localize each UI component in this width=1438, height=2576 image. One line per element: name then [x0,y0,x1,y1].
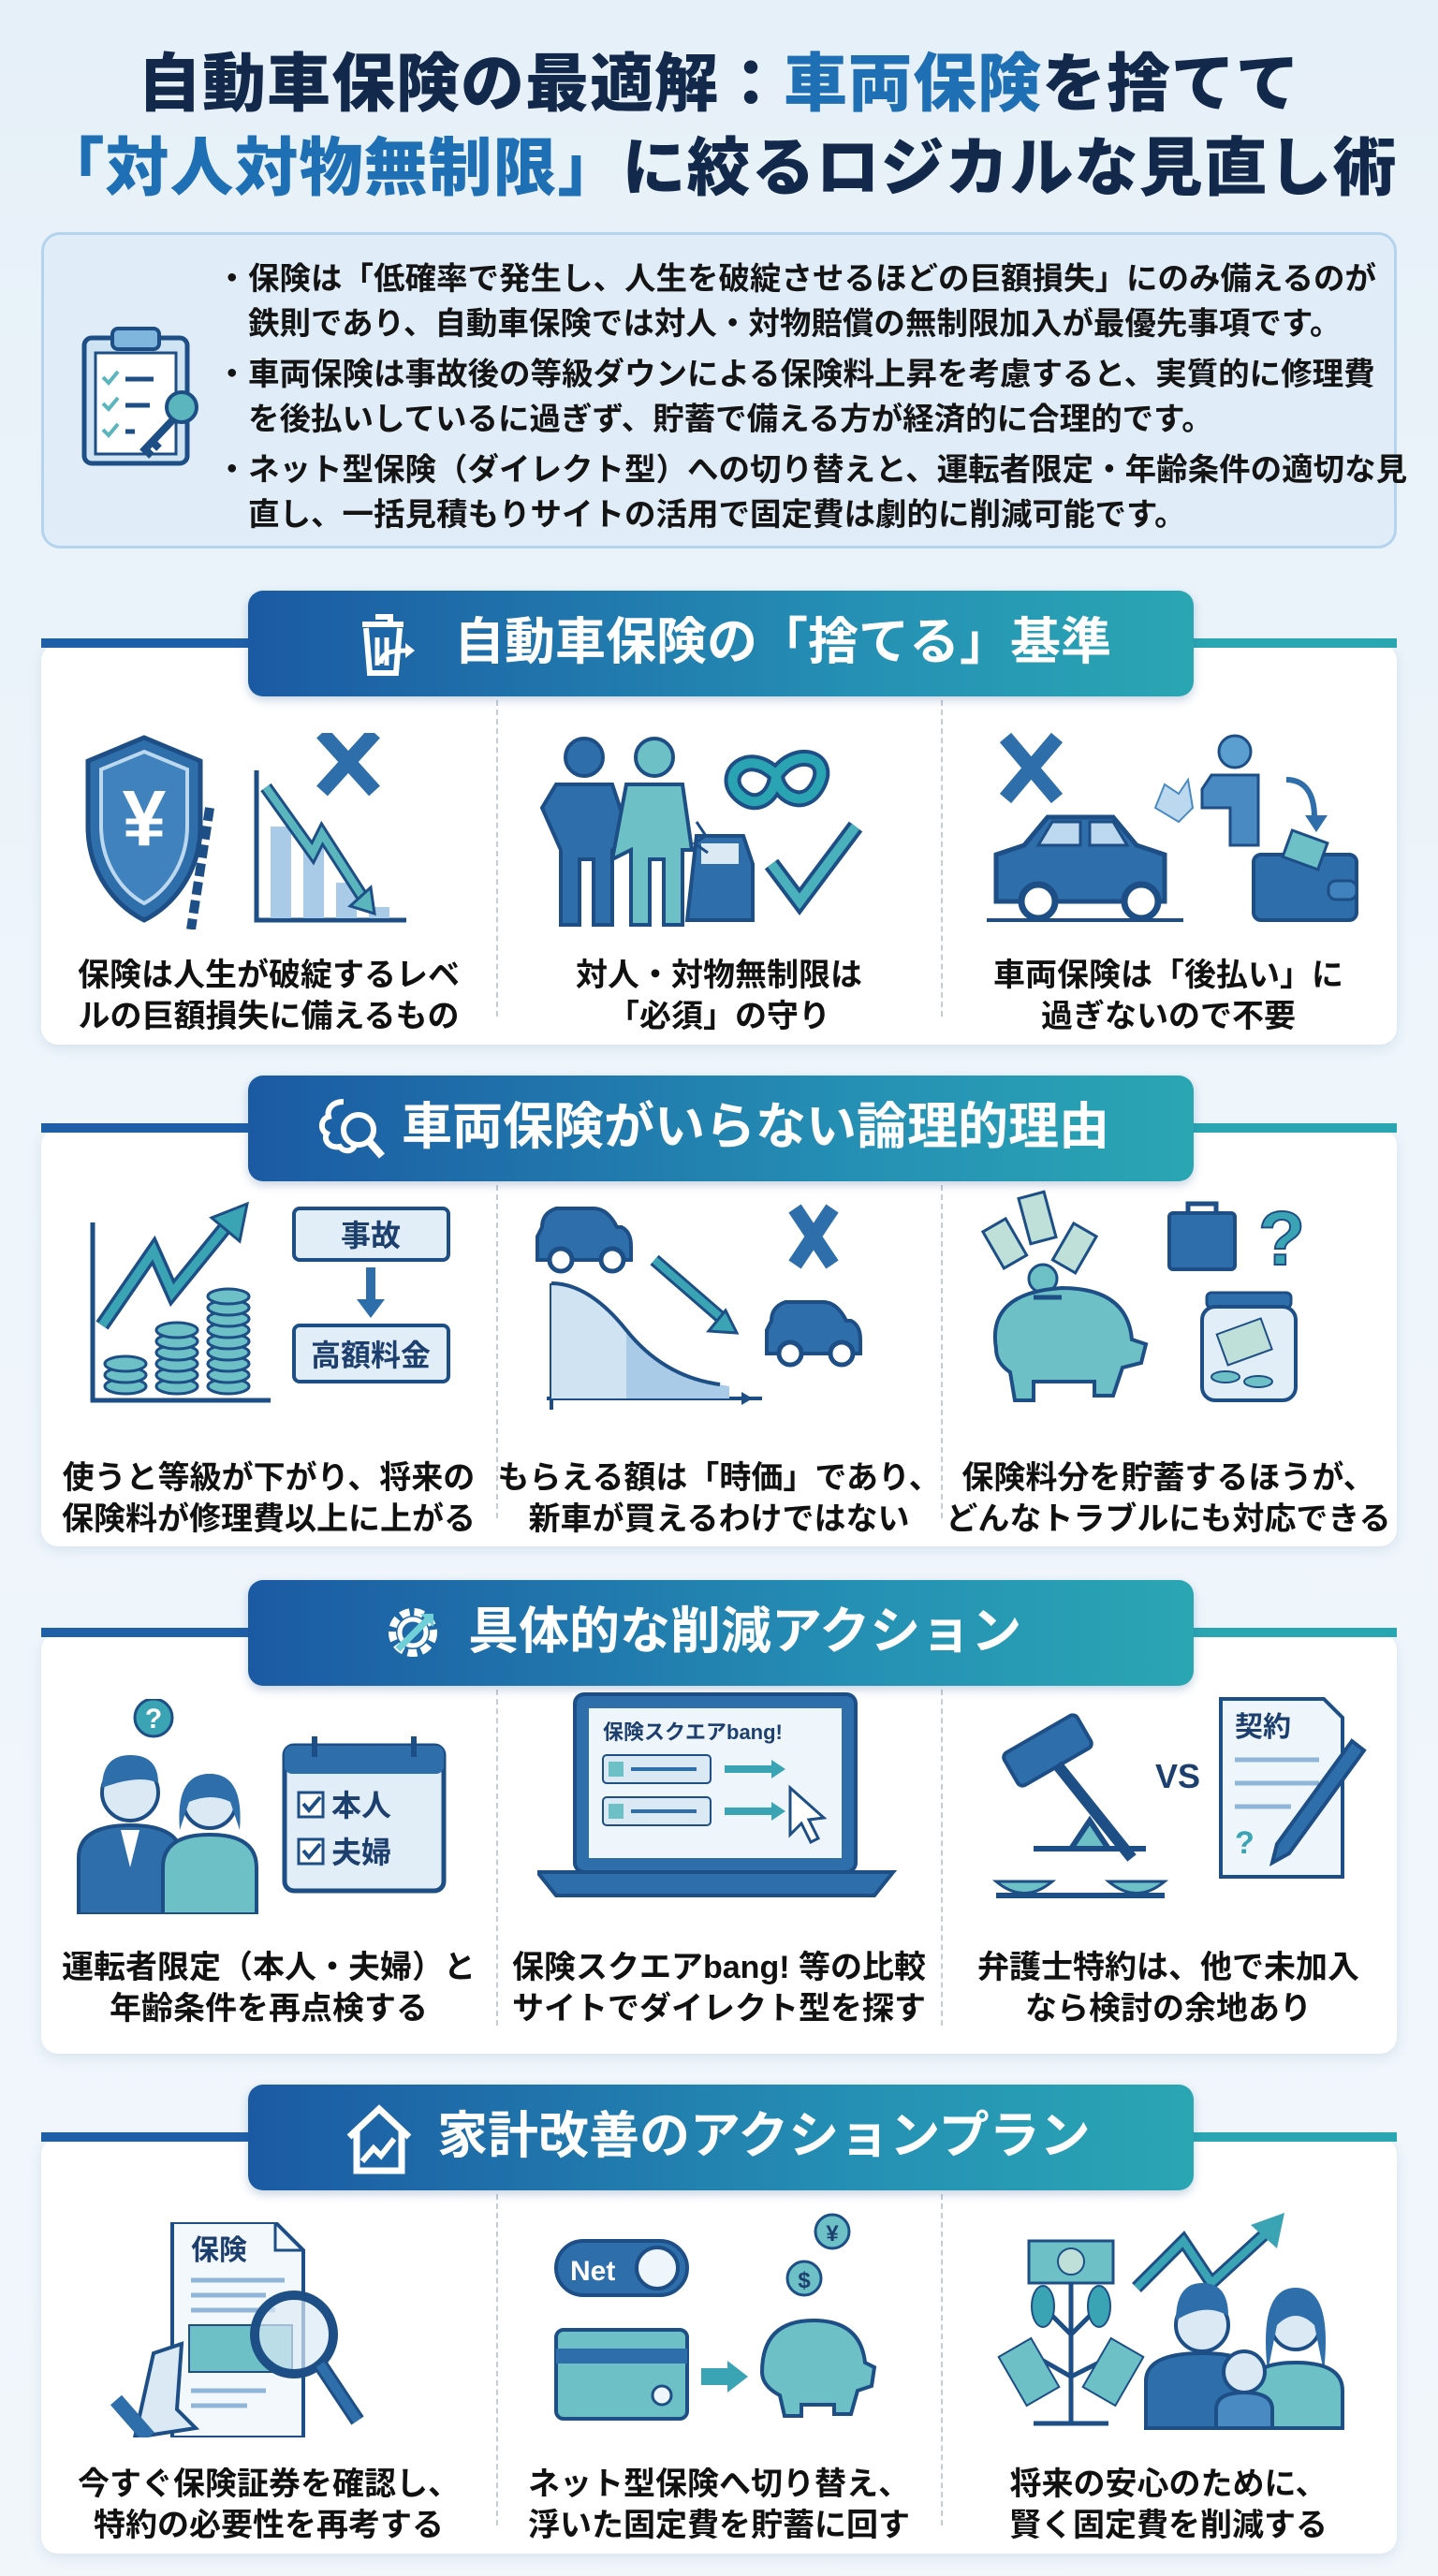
icon: clipboard with key [82,327,198,466]
caption 3-3: なら検討の余地あり [1025,1991,1312,2027]
header line right [1184,1123,1397,1133]
caption 3-3 [977,1950,1359,2027]
section header: 家計改善のアクションプラン [248,2085,1194,2190]
caption 3-2 [512,1950,926,2027]
summary box: 鉄則であり、自動車保険では対人・対物賠償の無制限加入が最優先事項です。 [248,307,1341,342]
caption 2-1: 使うと等級が下がり、将来の [63,1460,475,1496]
caption 1-2: 対人・対物無制限は [576,958,862,993]
icon: rising premiums and coins: 高額料金 [311,1339,431,1372]
panel: 削減アクション [41,1633,1397,2054]
caption 4-3: 賢く固定費を削減する [1009,2508,1328,2543]
caption 1-1: 保険は人生が破綻するレベ [78,958,460,993]
caption 1-1 [78,958,460,1034]
header line right [1184,2132,1397,2142]
caption 3-2: 保険スクエアbang! 等の比較 [512,1950,926,1985]
caption 3-1 [62,1950,476,2027]
caption 4-3: 将来の安心のために、 [1009,2466,1327,2502]
caption 2-2: 新車が買えるわけではない [528,1501,909,1537]
icon: Net toggle, card to piggy: Net [570,2256,615,2287]
summary box: を後払いしているに過ぎず、貯蓄で備える方が経済的に合理的です。 [248,402,1213,437]
icon: gavel, VS, contract [992,1697,1367,1898]
icon: money tree and family [997,2213,1344,2430]
icon: rising premiums and coins: 事故 [341,1219,401,1252]
icon: gavel, VS, contract: VS [1155,1757,1200,1795]
title: 「対人対物無制限」に絞るロジカルな見直し術 [40,133,1398,204]
section header: 論理的理由 [248,1076,1194,1181]
caption 1-1: ルの巨額損失に備えるもの [79,999,459,1034]
caption 4-1: 今すぐ保険証券を確認し、 [78,2466,460,2502]
icon: couple and calendar: ? [145,1704,162,1734]
caption 2-3 [946,1460,1391,1537]
icon: trash can [362,614,415,676]
caption 2-2 [497,1460,941,1537]
icon: gavel, VS, contract: 契約 [1235,1712,1291,1743]
icon: X, damaged car, person, wallet [987,733,1358,922]
icon: brain magnifier [318,1099,385,1159]
caption 3-1: 運転者限定（本人・夫婦）と [62,1950,476,1985]
panel: 捨てる基準 [41,644,1397,1045]
caption 3-2: サイトでダイレクト型を探す [512,1991,926,2027]
header line left [41,638,257,648]
section header: 家計改善のアクションプラン: 家計改善のアクションプラン [437,2108,1091,2164]
icon: policy document with magnifier: 保険 [191,2235,247,2266]
header line right [1184,1628,1397,1637]
icon: shield yen and falling chart: ¥ [123,774,167,862]
caption 2-1 [62,1460,476,1537]
caption 2-3: どんなトラブルにも対応できる [946,1501,1391,1537]
caption 4-3 [1009,2466,1328,2543]
section header: 論理的理由: 車両保険がいらない論理的理由 [402,1099,1109,1155]
section header: 捨てる基準: 自動車保険の「捨てる」基準 [454,614,1111,670]
caption 2-3: 保険料分を貯蓄するほうが、 [961,1460,1375,1496]
icon: piggy bank savings [981,1190,1305,1402]
section header: 具体的な削減アクション [248,1580,1194,1686]
panel: 家計改善のアクションプラン [41,2138,1397,2554]
section header: 捨てる基準 [248,591,1194,696]
summary box: ネット型保険（ダイレクト型）への切り替えと、運転者限定・年齢条件の適切な見 [248,453,1407,488]
icon: handshake, car, infinity, check [539,737,863,927]
icon: couple and calendar [77,1699,446,1914]
icon: couple and calendar: 本人 [331,1789,391,1822]
icon: depreciation chart [536,1204,862,1410]
caption 1-3: 過ぎないので不要 [1041,999,1296,1034]
caption 2-2: もらえる額は「時価」であり、 [497,1460,941,1496]
icon: Net toggle, card to piggy: ¥ [826,2221,839,2247]
icon: piggy bank savings: ? [1258,1196,1305,1281]
icon: gear with arrow [389,1608,437,1657]
section header: 具体的な削減アクション: 具体的な削減アクション [468,1603,1021,1660]
icon: gavel, VS, contract: ? [1235,1825,1255,1861]
summary box: 保険は「低確率で発生し、人生を破綻させるほどの巨額損失」にのみ備えるのが [248,262,1376,297]
icon: Net toggle, card to piggy [554,2213,876,2421]
caption 4-2: ネット型保険へ切り替え、 [528,2466,910,2502]
icon: Net toggle, card to piggy: $ [798,2268,811,2293]
summary box: 車両保険は事故後の等級ダウンによる保険料上昇を考慮すると、実質的に修理費 [248,358,1375,392]
header line left [41,1123,257,1133]
caption 1-3 [993,958,1343,1034]
panel: 論理的理由 [41,1129,1397,1546]
caption 4-2 [528,2466,910,2543]
caption 1-3: 車両保険は「後払い」に [993,958,1343,993]
summary box [41,232,1397,549]
icon: house with rising arrow [346,2104,412,2174]
caption 4-2: 浮いた固定費を貯蓄に回す [528,2508,910,2543]
title [40,49,1398,204]
caption 3-1: 年齢条件を再点検する [110,1991,428,2027]
icon: shield yen and falling chart [86,733,406,929]
caption 3-3: 弁護士特約は、他で未加入 [977,1950,1359,1985]
icon: laptop comparison site: 保険スクエアbang! [603,1720,783,1744]
caption 4-1: 特約の必要性を再考する [94,2508,444,2543]
icon: couple and calendar: 夫婦 [331,1836,391,1869]
header line left [41,1628,257,1637]
icon: laptop comparison site [537,1692,897,1897]
icon: policy document with magnifier [110,2222,364,2437]
summary box: 直し、一括見積もりサイトの活用で固定費は劇的に削減可能です。 [248,498,1186,533]
caption 1-2: 「必須」の守り [608,999,830,1034]
icon: rising premiums and coins [90,1202,450,1402]
title: 自動車保険の最適解：車両保険を捨てて [138,49,1300,120]
caption 2-1: 保険料が修理費以上に上がる [62,1501,476,1537]
header line left [41,2132,257,2142]
header line right [1184,638,1397,648]
caption 1-2 [576,958,862,1034]
caption 4-1 [78,2466,460,2543]
